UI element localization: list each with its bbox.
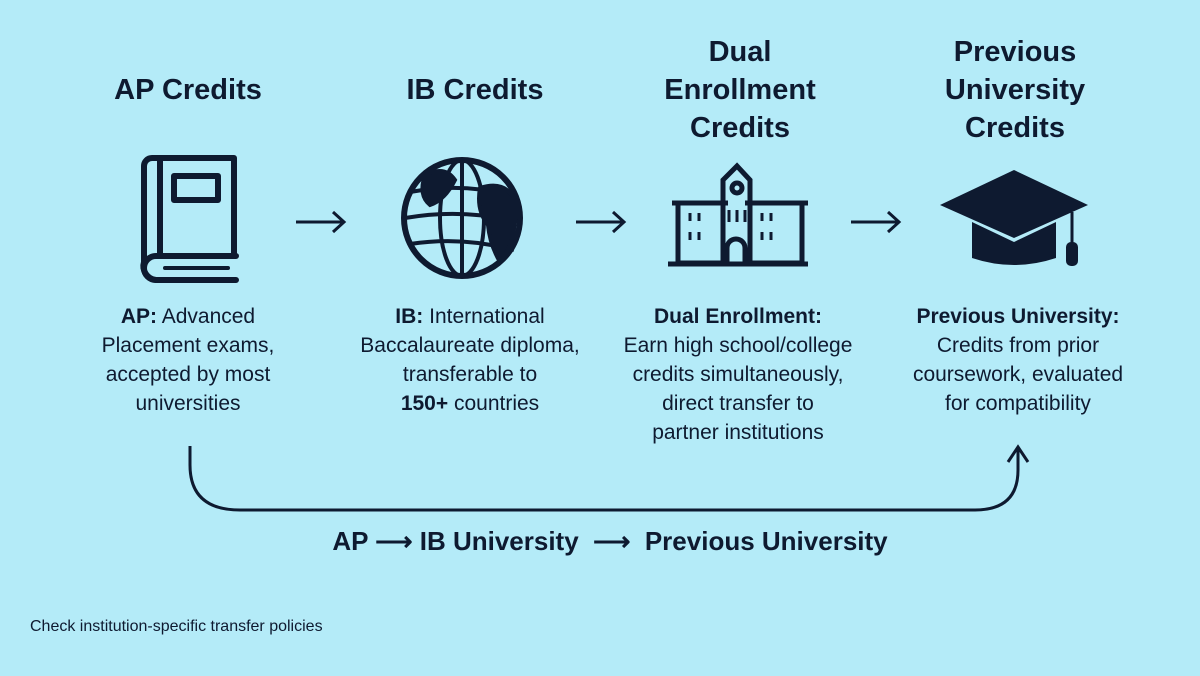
text: AP description: AP: Advanced — [121, 305, 255, 328]
icon: book — [143, 158, 236, 280]
title: Dual Enrollment Credits: Credits — [690, 112, 790, 144]
arrows — [296, 212, 899, 232]
text: IB description: IB: International — [395, 305, 545, 328]
text: Previous university description: coursework, evaluated — [913, 363, 1123, 386]
text: AP description — [102, 305, 274, 415]
curved arrow — [190, 446, 1028, 510]
text: Dual enrollment description — [624, 305, 852, 444]
text: Dual enrollment description: Earn high school/college — [624, 334, 852, 357]
footer note: Check institution-specific transfer policies — [30, 618, 323, 635]
title: Dual Enrollment Credits — [664, 36, 816, 144]
title: IB Credits: IB Credits — [406, 74, 543, 106]
text: IB description: 150+ countries — [401, 392, 539, 415]
icon: globe — [404, 160, 520, 276]
text: pathway summary: AP ⟶ IB University ⟶ Previous University — [332, 526, 888, 556]
title: Dual Enrollment Credits: Enrollment — [664, 74, 816, 106]
title: Previous University Credits — [945, 36, 1085, 144]
text: Dual enrollment description: partner institutions — [652, 421, 824, 444]
title: Previous University Credits: University — [945, 74, 1085, 106]
title: Previous University Credits: Credits — [965, 112, 1065, 144]
title: Dual Enrollment Credits: Dual — [709, 36, 771, 68]
title: Previous University Credits: Previous — [954, 36, 1076, 68]
text: Previous university description: for compatibility — [945, 392, 1091, 415]
text: AP description: universities — [135, 392, 241, 415]
text: Dual enrollment description: Dual Enrollment: — [654, 305, 822, 328]
text: AP description: accepted by most — [106, 363, 270, 386]
text: AP description: Placement exams, — [102, 334, 274, 357]
icon: graduation cap — [940, 170, 1088, 266]
text: Previous university description: Credits from prior — [937, 334, 1099, 357]
text: Previous university description: Previous University: — [916, 305, 1120, 328]
text: IB description: transferable to — [403, 363, 537, 386]
text: IB description — [360, 305, 580, 415]
text: Dual enrollment description: direct transfer to — [662, 392, 814, 415]
icon: school building — [668, 166, 808, 264]
text: Previous university description — [913, 305, 1123, 415]
title: AP Credits: AP Credits — [114, 74, 262, 106]
text: IB description: Baccalaureate diploma, — [360, 334, 580, 357]
text: Dual enrollment description: credits simultaneously, — [633, 363, 843, 386]
